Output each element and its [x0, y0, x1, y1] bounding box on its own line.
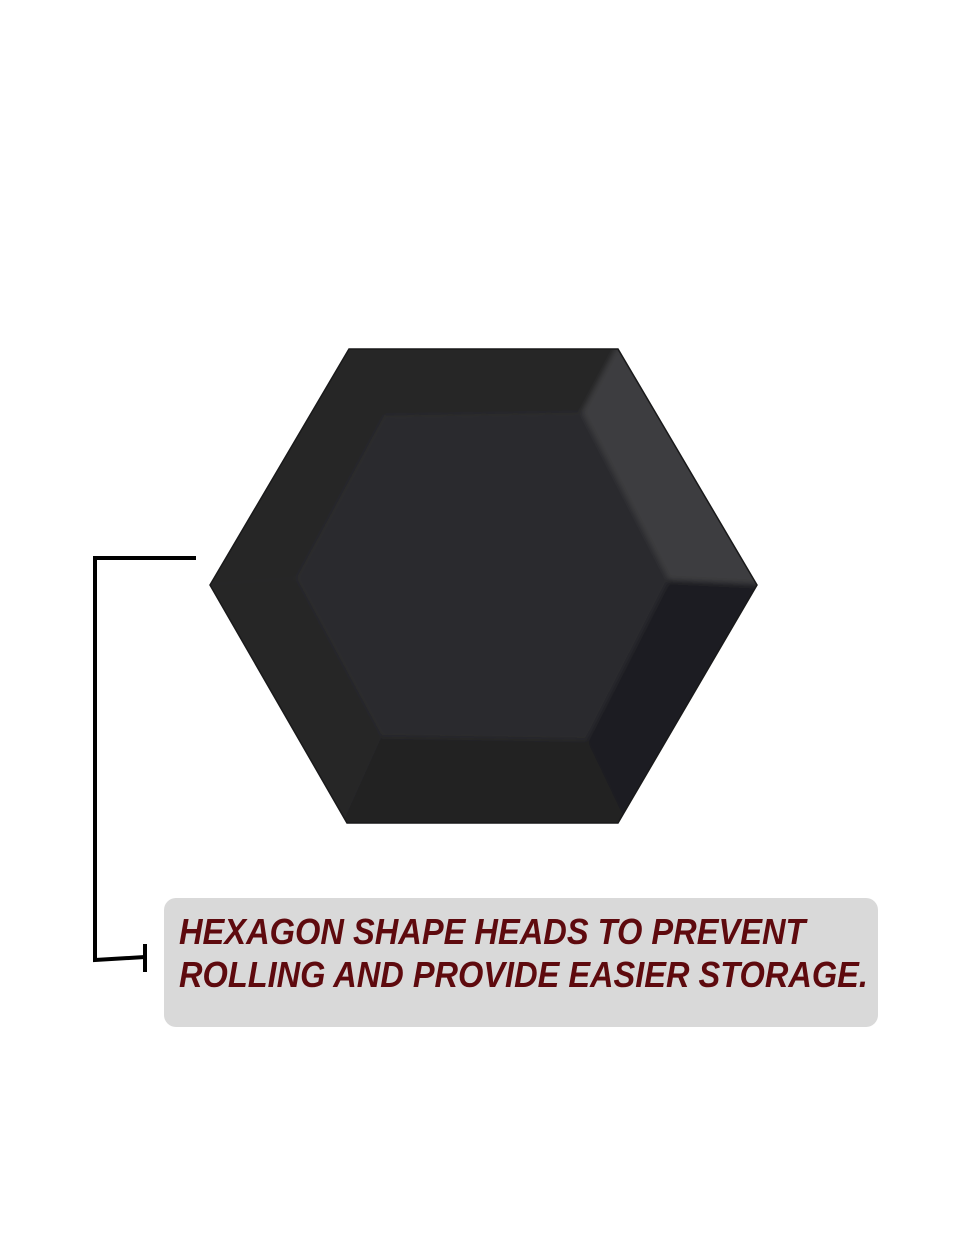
- callout text line 2: ROLLING AND PROVIDE EASIER STORAGE.: [179, 954, 868, 994]
- callout text line 1: HEXAGON SHAPE HEADS TO PREVENT: [179, 910, 805, 952]
- icon: hexagonal dumbbell head: [209, 348, 758, 824]
- callout: hexagon description: [164, 898, 878, 1027]
